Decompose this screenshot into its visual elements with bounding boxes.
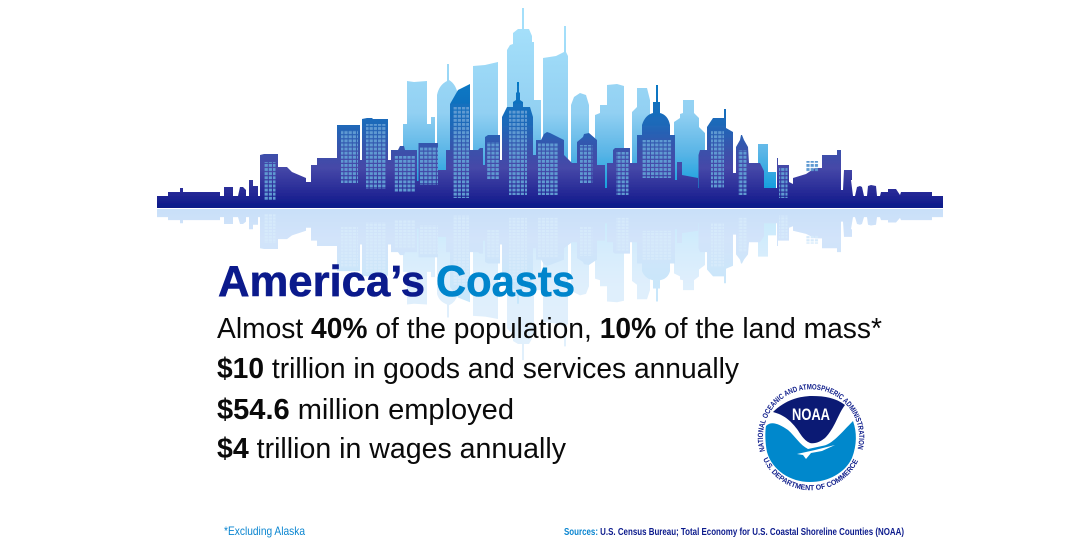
fact: employed: $54.6 million employed xyxy=(217,394,514,426)
sources: Sources: U.S. Census Bureau; Total Economy for U.S. Coastal Shoreline Counties (NOAA) xyxy=(564,526,904,538)
NOAA logo: U.S. DEPARTMENT OF COMMERCE xyxy=(764,457,858,490)
foreground city silhouette xyxy=(157,82,943,208)
fact: population: Almost 40% of the population, 10% of the land mass* xyxy=(217,313,882,345)
building windows xyxy=(264,107,819,200)
fact: goods and services: $10 trillion in goods and services annually xyxy=(217,353,739,385)
infographic canvas xyxy=(157,8,943,538)
title: Coasts: Coasts xyxy=(436,257,575,306)
city skyline xyxy=(157,8,943,208)
title: America's: America’s xyxy=(218,257,425,306)
title xyxy=(218,257,575,306)
NOAA logo xyxy=(758,384,864,490)
NOAA logo: NOAA xyxy=(792,405,830,424)
fact: wages: $4 trillion in wages annually xyxy=(217,433,566,465)
NOAA logo: NATIONAL OCEANIC AND ATMOSPHERIC ADMINISTRATION xyxy=(758,384,864,452)
facts list xyxy=(217,313,882,465)
footnote: *Excluding Alaska xyxy=(224,524,305,538)
skyline reflection xyxy=(157,208,943,360)
background towers xyxy=(403,8,776,190)
